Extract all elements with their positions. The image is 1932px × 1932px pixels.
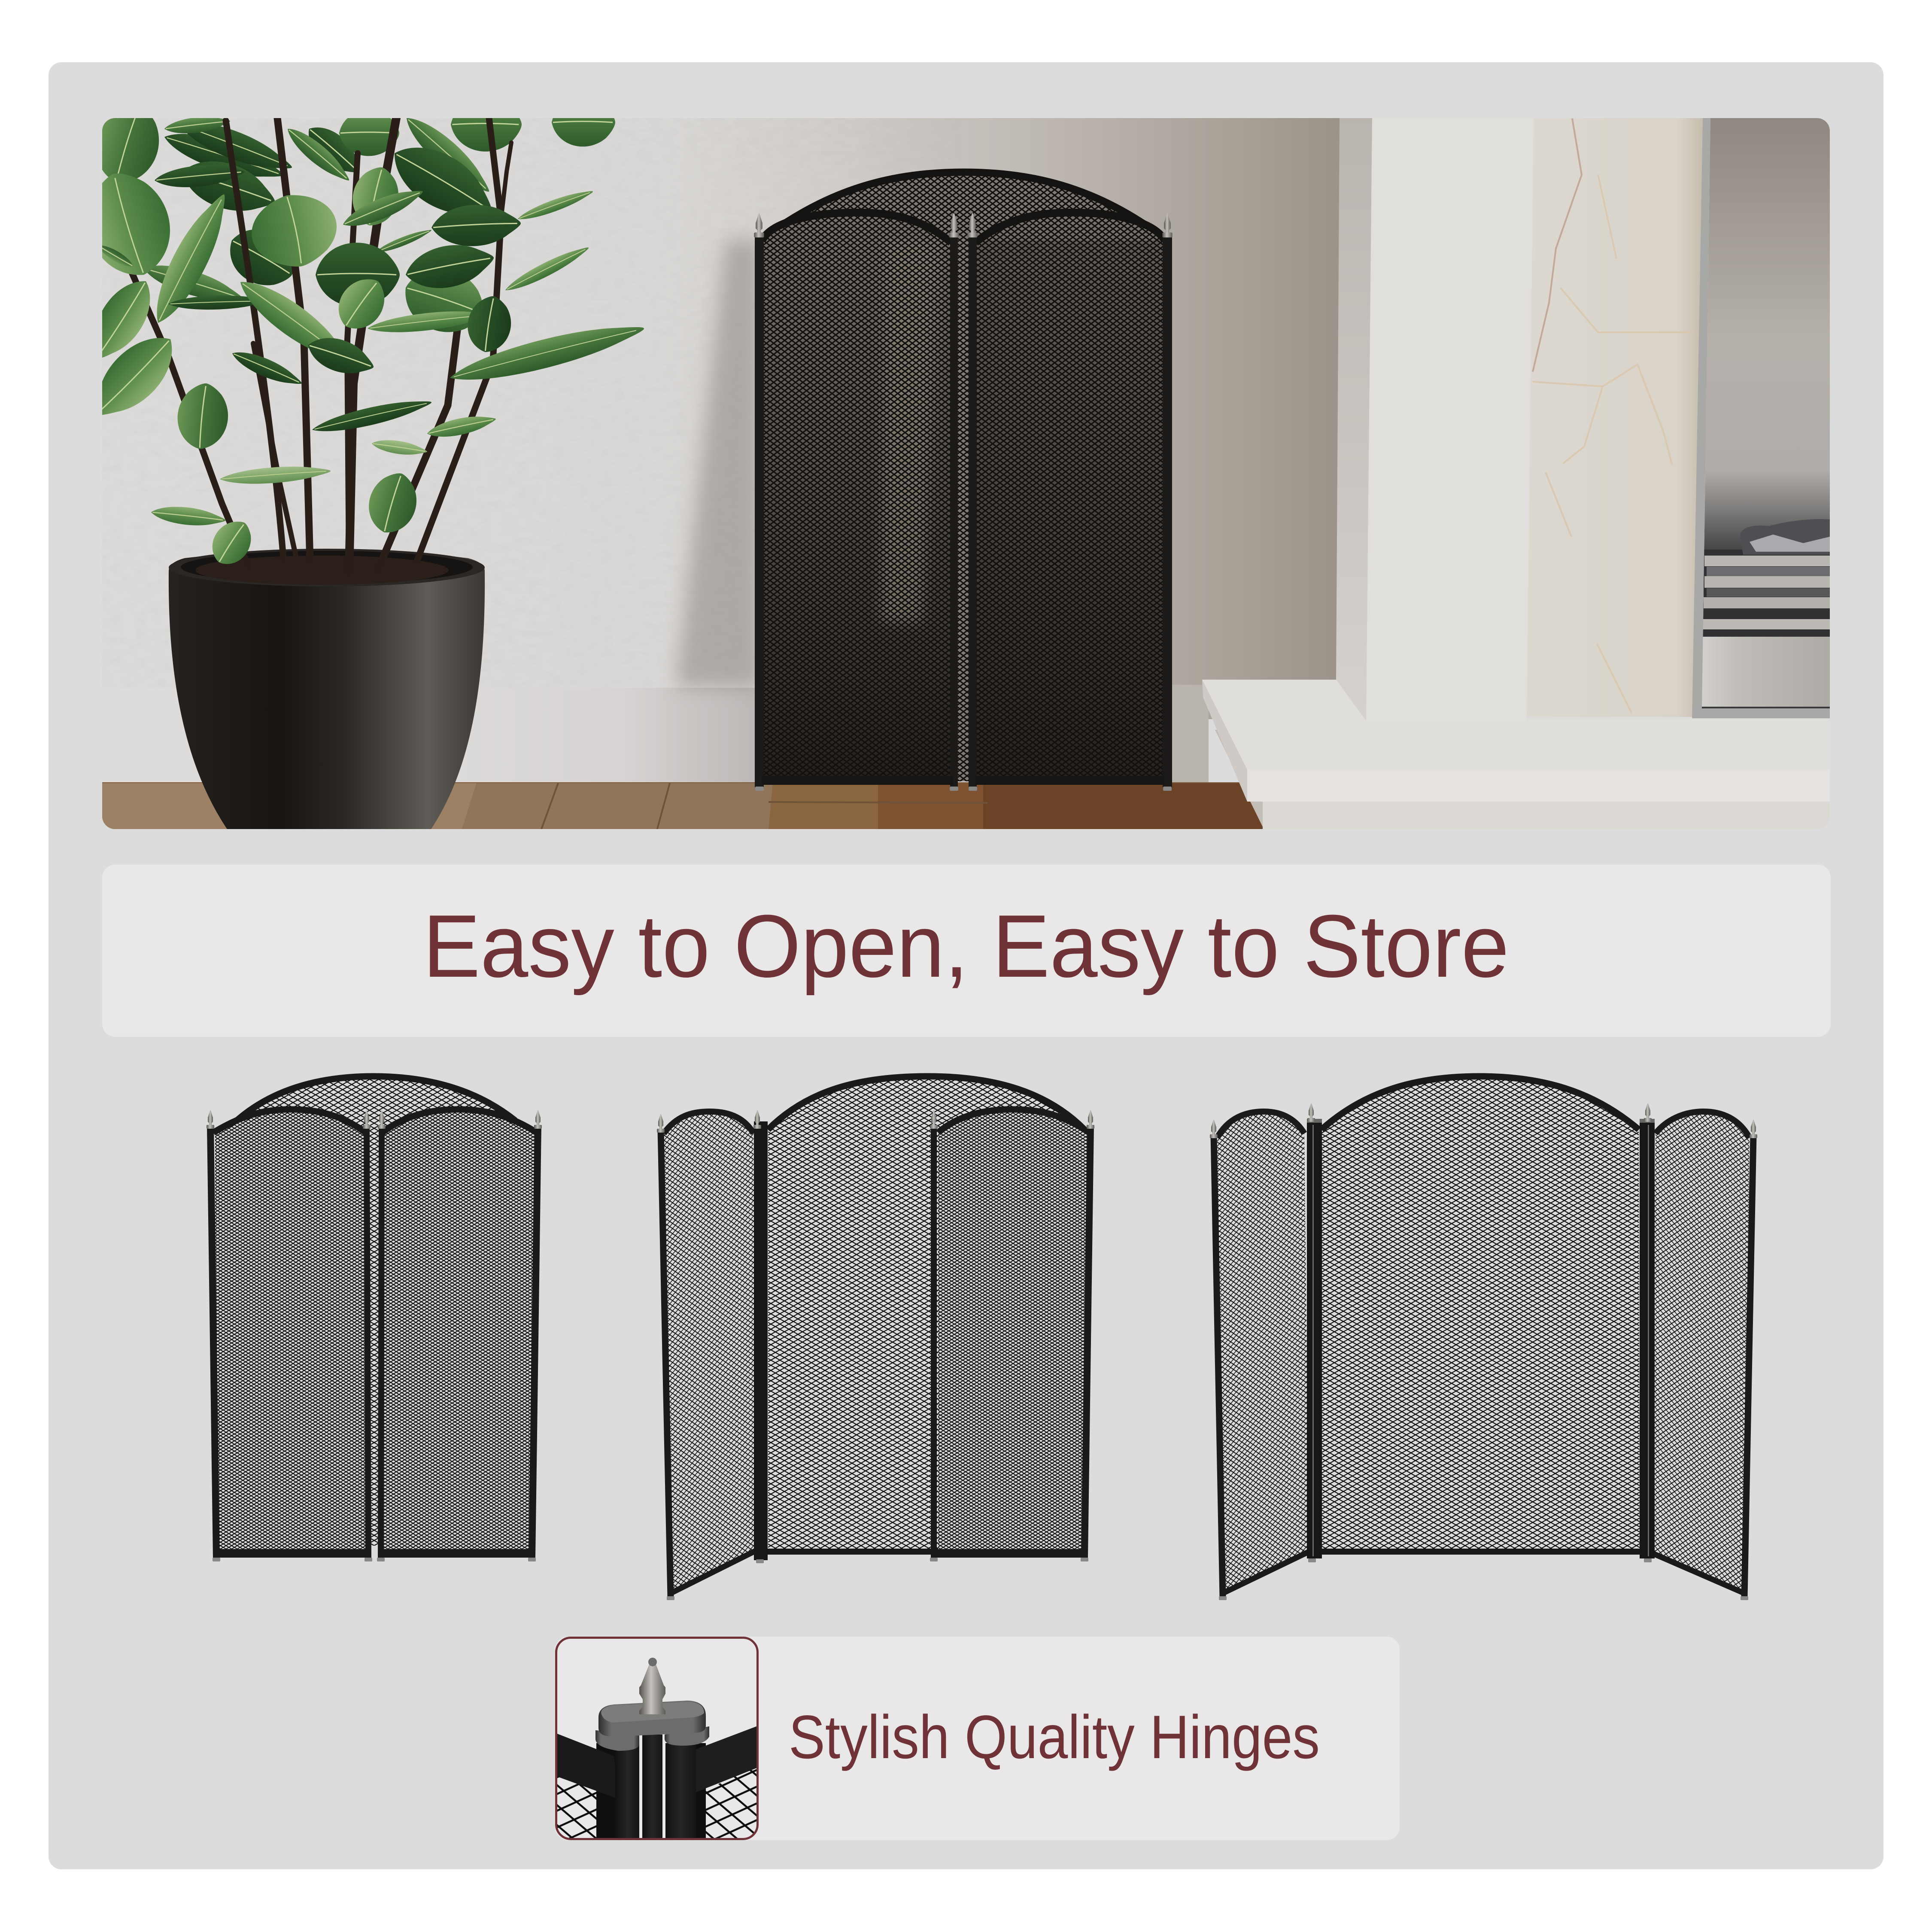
silver finials and feet xyxy=(754,213,1173,791)
wall shadow of the fire screen xyxy=(676,240,760,687)
potted rubber plant xyxy=(75,96,647,833)
right wing xyxy=(1649,1112,1753,1596)
left wing xyxy=(1214,1112,1309,1596)
hinge posts xyxy=(615,1735,696,1842)
right panel xyxy=(381,1106,538,1558)
right folded panel xyxy=(969,210,1172,787)
callout band: stylish quality hinges xyxy=(555,1637,1400,1840)
plant front leaves xyxy=(75,96,647,572)
fire screen: fully opened xyxy=(1210,1075,1757,1600)
finials xyxy=(207,1110,542,1561)
left folded panel xyxy=(755,210,958,787)
back arch xyxy=(235,1075,515,1546)
hinge posts xyxy=(754,1121,768,1560)
heading band xyxy=(102,865,1831,1037)
right hinge posts xyxy=(1640,1119,1655,1558)
plant stems xyxy=(128,118,511,572)
heading text: Easy to Open, Easy to Store xyxy=(423,896,1509,996)
lower collars xyxy=(595,1726,709,1751)
finials xyxy=(1210,1103,1757,1600)
mantel pillar xyxy=(1336,118,1534,721)
left hinge posts xyxy=(1307,1119,1322,1558)
fire screen: half opened xyxy=(657,1075,1094,1600)
diagonal tubes xyxy=(554,1725,760,1799)
back posts xyxy=(596,1743,706,1842)
fire screen: fully folded xyxy=(207,1075,542,1561)
wooden floor xyxy=(102,782,1287,830)
baseboard xyxy=(102,685,1209,783)
centre panel xyxy=(1320,1075,1640,1555)
front folded panel xyxy=(934,1106,1091,1558)
left swung panel xyxy=(661,1112,756,1596)
fire screen in the room xyxy=(754,172,1173,791)
white mantel hearth xyxy=(1202,680,1834,832)
finial xyxy=(639,1658,665,1714)
centre panel xyxy=(766,1075,1084,1555)
wall xyxy=(102,118,1347,719)
photo: fire screen leaning on wall in a living room xyxy=(75,96,1834,833)
callout text: Stylish Quality Hinges xyxy=(789,1703,1320,1771)
fireplace opening with steel frame, logs and bars xyxy=(1692,118,1833,718)
plant back leaves xyxy=(140,97,615,310)
back centre panel xyxy=(784,172,1144,781)
icon: hinge close-up thumbnail xyxy=(554,1637,760,1842)
left panel xyxy=(210,1106,368,1558)
plant pot xyxy=(169,549,485,833)
marble slip xyxy=(1527,118,1703,717)
finials xyxy=(657,1110,1094,1600)
mesh behind xyxy=(554,1765,760,1842)
cap plate xyxy=(598,1701,706,1737)
